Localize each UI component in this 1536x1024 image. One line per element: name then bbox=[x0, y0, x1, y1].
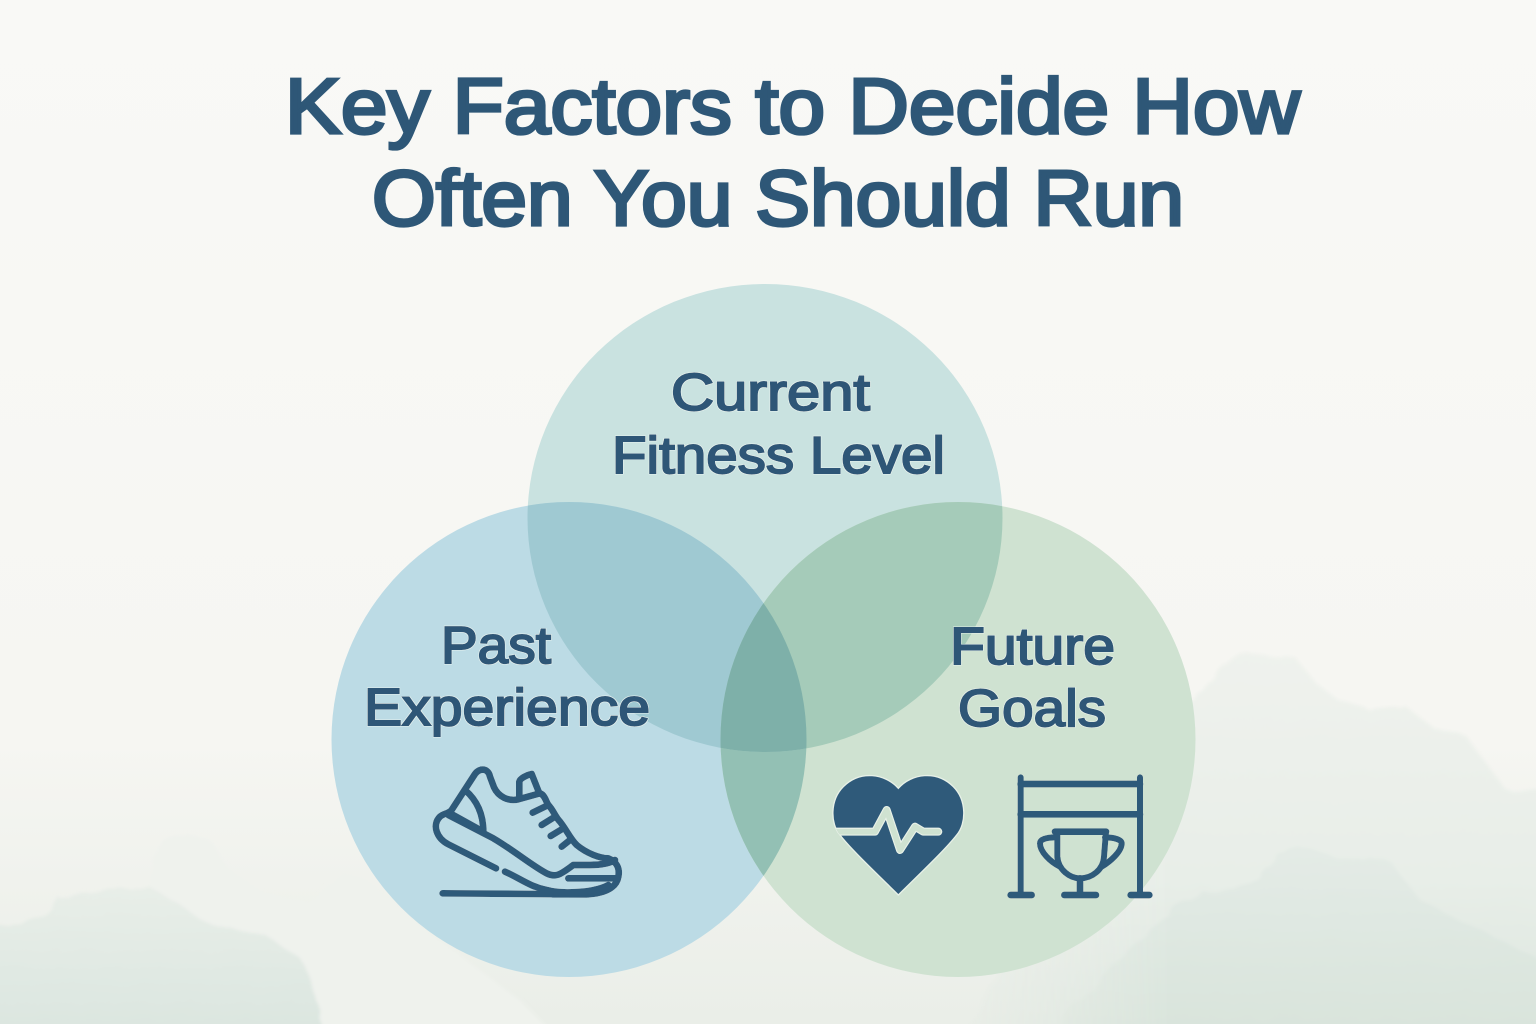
circle: past experience bbox=[332, 502, 806, 977]
overlap: current and past bbox=[528, 502, 764, 748]
overlap: centre bbox=[720, 604, 806, 752]
circle: future goals bbox=[720, 502, 1196, 977]
overlap: past and future bbox=[720, 748, 806, 876]
label: current fitness level: Fitness Level bbox=[612, 427, 945, 485]
label: past experience bbox=[364, 617, 650, 737]
title: Key Factors to Decide How bbox=[285, 62, 1301, 150]
circle: current fitness level bbox=[528, 284, 1002, 752]
venn diagram bbox=[332, 284, 1196, 977]
title bbox=[285, 62, 1301, 242]
icon: finish line with trophy bbox=[1011, 777, 1149, 895]
label: future goals: Future bbox=[950, 618, 1115, 676]
label: future goals: Goals bbox=[958, 680, 1106, 738]
icon: running shoe bbox=[436, 770, 619, 894]
label: current fitness level bbox=[612, 364, 945, 485]
label: past experience: Experience bbox=[364, 679, 650, 737]
label: current fitness level: Current bbox=[671, 364, 871, 422]
overlap: current and future bbox=[764, 502, 1002, 748]
icon: heart with pulse bbox=[827, 776, 964, 895]
title: Often You Should Run bbox=[372, 154, 1184, 242]
label: past experience: Past bbox=[441, 617, 552, 675]
label: future goals bbox=[950, 618, 1115, 738]
background bbox=[0, 654, 1536, 1024]
